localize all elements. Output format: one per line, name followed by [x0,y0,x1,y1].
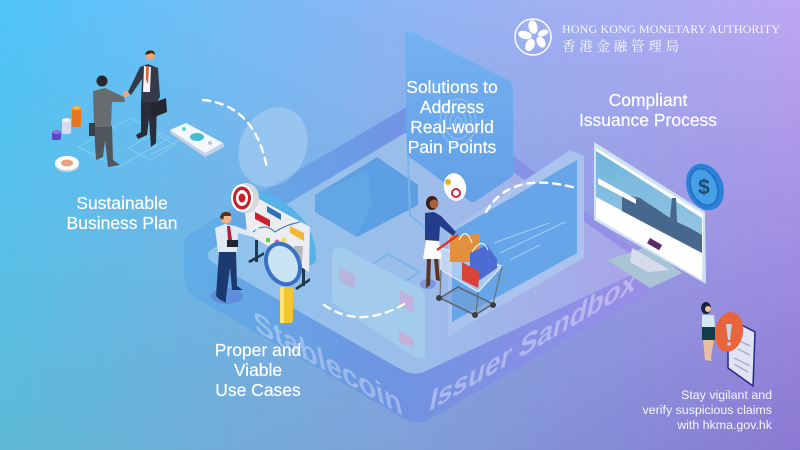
platform side band [184,108,650,422]
man in grey suit [89,76,125,167]
note: stay vigilant: Stay vigilant and [681,388,772,402]
screen panel behind shopper [448,150,584,336]
heading: compliant issuance process: Compliant [609,90,688,110]
heading: solutions to address real-world pain points: Solutions to [406,77,498,97]
skyline [622,194,702,253]
heading: solutions to address real-world pain points: Address [420,97,484,117]
illustration: woman with alert phone [701,302,755,386]
magnifying glass [260,238,306,323]
illustration: shopper with cart [420,171,502,318]
heading: sustainable business plan: Business Plan [67,213,177,233]
fingerprint panel [405,31,513,202]
note: stay vigilant: with hkma.gov.hk [676,418,773,432]
dashed arrows connecting the steps [203,100,576,317]
note: stay vigilant: verify suspicious claims [643,403,772,417]
stand line on floor [358,156,425,292]
platform: stablecoin issuer sandbox [184,31,650,423]
heading: solutions to address real-world pain points: Real-world [410,117,494,137]
logo: HKMA [515,19,780,55]
board [231,183,310,290]
alert badge [712,310,746,354]
phone [728,318,755,386]
sky-blue backdrop [250,190,316,272]
man with tablet [215,212,260,303]
monitor frame [594,142,706,284]
label: Issuer Sandbox: Issuer Sandbox [427,262,640,419]
dollar coin: $ [698,176,710,199]
man in dark suit [123,50,167,147]
monitor stand [607,247,682,288]
label: Stablecoin: Stablecoin [250,303,405,423]
dollar coin [679,158,731,216]
heading: proper and viable use cases: Viable [234,360,282,380]
heading: sustainable business plan: Sustainable [76,193,168,213]
floor outline [78,118,200,167]
target icon [231,183,259,213]
heading: compliant issuance process: Issuance Process [579,110,717,130]
heading: proper and viable use cases: Use Cases [215,380,301,400]
illustration: analyst with board and magnifier [211,183,316,323]
banknote stack [170,123,224,157]
speech bubble [441,171,469,203]
woman [701,302,715,361]
box block [315,157,418,237]
heading: solutions to address real-world pain points: Pain Points [408,137,497,157]
illustration: business handshake [52,50,224,172]
Chinese name: 香港金融管理局 [562,39,679,54]
woman [423,196,456,288]
coin token [55,156,79,172]
heading: proper and viable use cases: Proper and [215,340,301,360]
shadow [420,279,436,289]
website screen [596,148,703,280]
platform top surface [208,133,642,374]
bauhinia emblem [515,19,551,55]
English name: HONG KONG MONETARY AUTHORITY [562,22,780,36]
shopping cart [436,234,502,318]
light card panel [332,247,425,358]
shadow [211,288,243,304]
translucent disc [226,96,320,198]
illustration: monitor with HKMA website [594,142,731,288]
bar chart tokens [52,106,81,140]
